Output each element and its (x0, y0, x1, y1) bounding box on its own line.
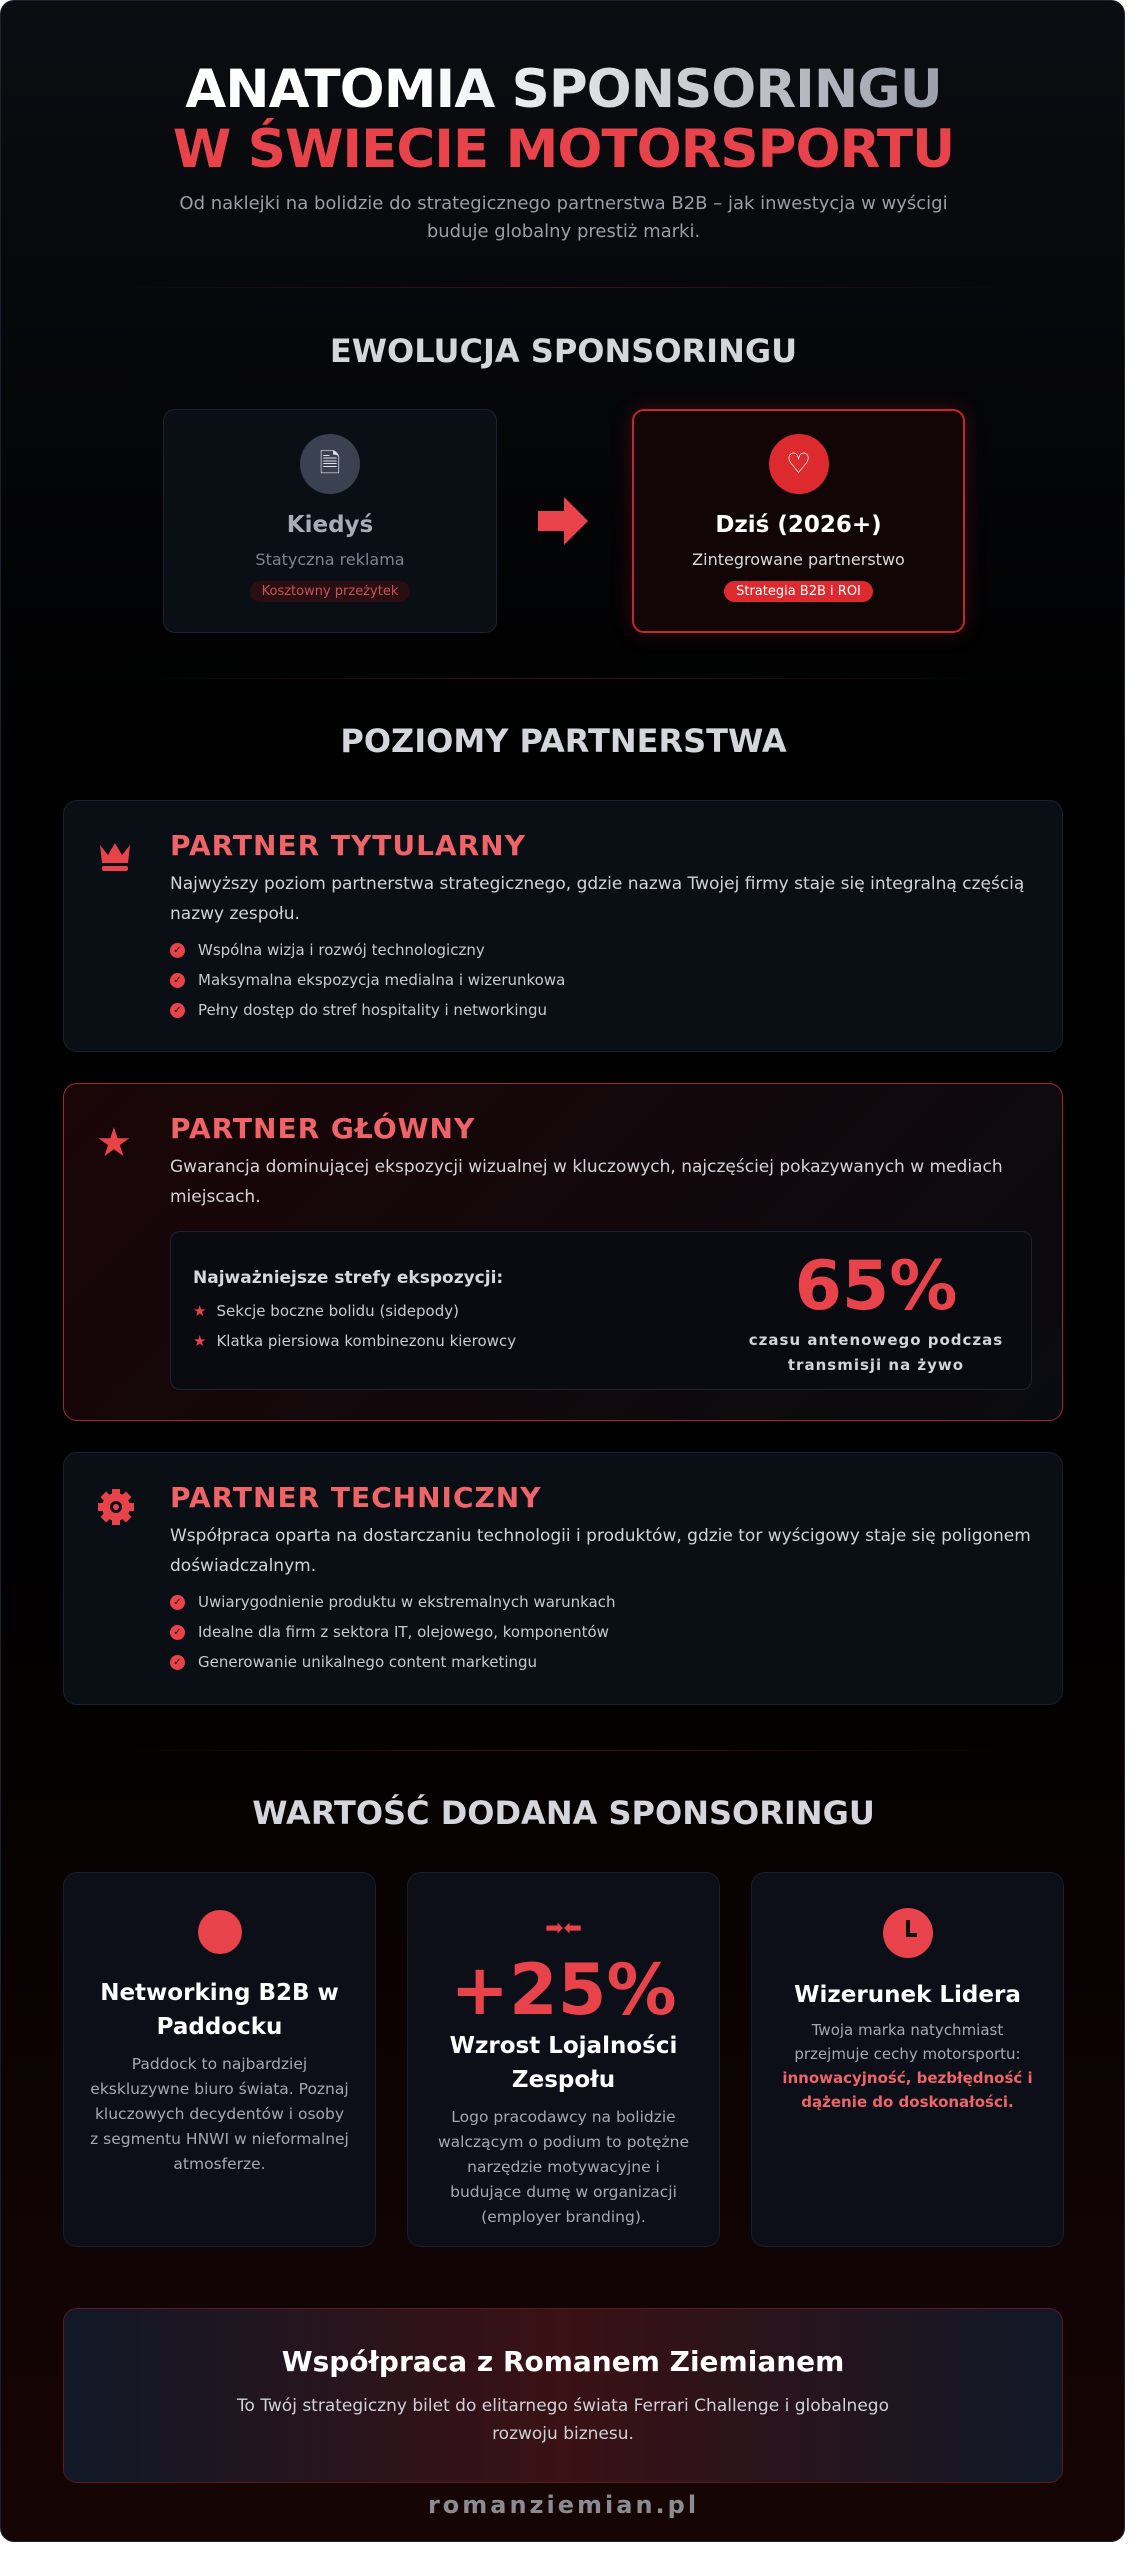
stat 65%: transmisji na żywo (788, 1356, 964, 1374)
icon: crown (100, 843, 130, 871)
footer: romanziemian.pl (428, 2491, 699, 2519)
stat 65%: 65% (795, 1247, 957, 1326)
icon: pie (198, 1910, 242, 1954)
panel: partner techniczny: ✓ (173, 1626, 182, 1638)
panel: partner techniczny: PARTNER TECHNICZNY (170, 1481, 542, 1514)
panel: partner tytularny: ✓ (173, 974, 182, 986)
callout: CTA: Współpraca z Romanem Ziemianem (282, 2345, 844, 2378)
card: loyalty (407, 1872, 720, 2247)
panel: partner techniczny: Idealne dla firm z sektora IT, olejowego, komponentów (198, 1623, 609, 1641)
card: kiedyś: Statyczna reklama (255, 550, 405, 569)
card: kiedyś: Kosztowny przeżytek (262, 584, 398, 599)
card: leader (751, 1872, 1064, 2247)
panel: partner techniczny (63, 1452, 1063, 1705)
card: loyalty: Wzrost Lojalności (450, 2033, 677, 2059)
exposure box: ★ Sekcje boczne bolidu (sidepody) (193, 1302, 459, 1320)
card: leader: przejmuje cechy motorsportu: (794, 2045, 1021, 2063)
card: leader: Twoja marka natychmiast (812, 2021, 1003, 2039)
card: networking: Paddocku (157, 2014, 282, 2040)
icon: star: ★ (96, 1120, 132, 1166)
panel: partner tytularny (63, 800, 1063, 1052)
icon: arrows: ➡⬅ (545, 1916, 582, 1941)
panel: partner tytularny: PARTNER TYTULARNY (170, 829, 526, 862)
card: dziś: Strategia B2B i ROI (736, 584, 861, 599)
card: loyalty: +25% (450, 1949, 677, 2031)
exposure box: ★ Klatka piersiowa kombinezonu kierowcy (193, 1332, 516, 1350)
icon: heart (768, 434, 828, 494)
card: loyalty: Logo pracodawcy na bolidzie walczącym o podium to potężne narzędzie motywacyjne i budujące dumę w organizacji (employer branding). (438, 2108, 689, 2226)
icon: document: 🗎 (320, 449, 340, 479)
card: networking: Paddock to najbardziej ekskluzywne biuro świata. Poznaj kluczowych decydentów i osoby z segmentu HNWI w nieformalnej atmosferze. (90, 2055, 349, 2173)
panel: partner techniczny: Współpraca oparta na dostarczaniu technologii i produktów, gdzie tor wyścigowy staje się poligonem doświadczalnym. (170, 1526, 1031, 1576)
panel: partner główny (63, 1083, 1063, 1421)
callout: CTA: rozwoju biznesu. (492, 2424, 634, 2444)
callout: CTA (63, 2308, 1063, 2483)
panel: partner tytularny: Wspólna wizja i rozwój technologiczny (198, 941, 485, 959)
heading: levels: POZIOMY PARTNERSTWA (340, 722, 787, 760)
panel: partner tytularny: ✓ (173, 944, 182, 956)
icon: heart: ♡ (786, 447, 811, 480)
panel: partner techniczny: Uwiarygodnienie produktu w ekstremalnych warunkach (198, 1593, 615, 1611)
panel: partner techniczny: ✓ (173, 1596, 182, 1608)
panel: partner główny: PARTNER GŁÓWNY (170, 1112, 475, 1145)
panel: partner techniczny: Generowanie unikalnego content marketingu (198, 1653, 537, 1671)
card: leader: innowacyjność, bezbłędność i dążenie do doskonałości. (782, 2069, 1033, 2111)
subtitle: Od naklejki na bolidzie do strategicznego partnerstwa B2B – jak inwestycja w wyścigi buduje globalny prestiż marki. (179, 193, 948, 242)
card: kiedyś: Kiedyś (287, 512, 373, 538)
icon: clock (882, 1908, 932, 1958)
card: dziś: Zintegrowane partnerstwo (692, 550, 905, 569)
stat 65%: czasu antenowego podczas (749, 1331, 1003, 1349)
title: ANATOMIA SPONSORINGU (185, 59, 942, 120)
exposure box (170, 1231, 1032, 1390)
card: dziś (632, 409, 965, 633)
card: loyalty: Zespołu (512, 2067, 615, 2093)
icon: gear (98, 1489, 134, 1525)
card: kiedyś (163, 409, 497, 633)
stat 65% (749, 1247, 1003, 1374)
arrow (538, 497, 588, 545)
panel: partner tytularny: ✓ (173, 1004, 182, 1016)
callout: CTA: To Twój strategiczny bilet do elitarnego świata Ferrari Challenge i globalnego (237, 2396, 889, 2416)
panel: partner techniczny: ✓ (173, 1656, 182, 1668)
exposure box: Najważniejsze strefy ekspozycji: (193, 1268, 503, 1288)
heading: evolution: EWOLUCJA SPONSORINGU (330, 332, 797, 370)
panel: partner tytularny: Pełny dostęp do stref hospitality i networkingu (198, 1001, 547, 1019)
title: W ŚWIECIE MOTORSPORTU (173, 119, 954, 180)
heading: value: WARTOŚĆ DODANA SPONSORINGU (252, 1794, 875, 1832)
title (173, 59, 954, 180)
card: dziś: Dziś (2026+) (715, 512, 882, 538)
card: networking (63, 1872, 376, 2247)
card: leader: Wizerunek Lidera (794, 1982, 1021, 2008)
panel: partner tytularny: Najwyższy poziom partnerstwa strategicznego, gdzie nazwa Twojej firmy staje się integralną częścią nazwy zespołu. (170, 874, 1024, 924)
panel: partner główny: Gwarancja dominującej ekspozycji wizualnej w kluczowych, najczęściej pokazywanych w mediach miejscach. (170, 1157, 1003, 1207)
panel: partner tytularny: Maksymalna ekspozycja medialna i wizerunkowa (198, 971, 565, 989)
card: networking: Networking B2B w (100, 1980, 339, 2006)
icon: document (300, 434, 360, 494)
